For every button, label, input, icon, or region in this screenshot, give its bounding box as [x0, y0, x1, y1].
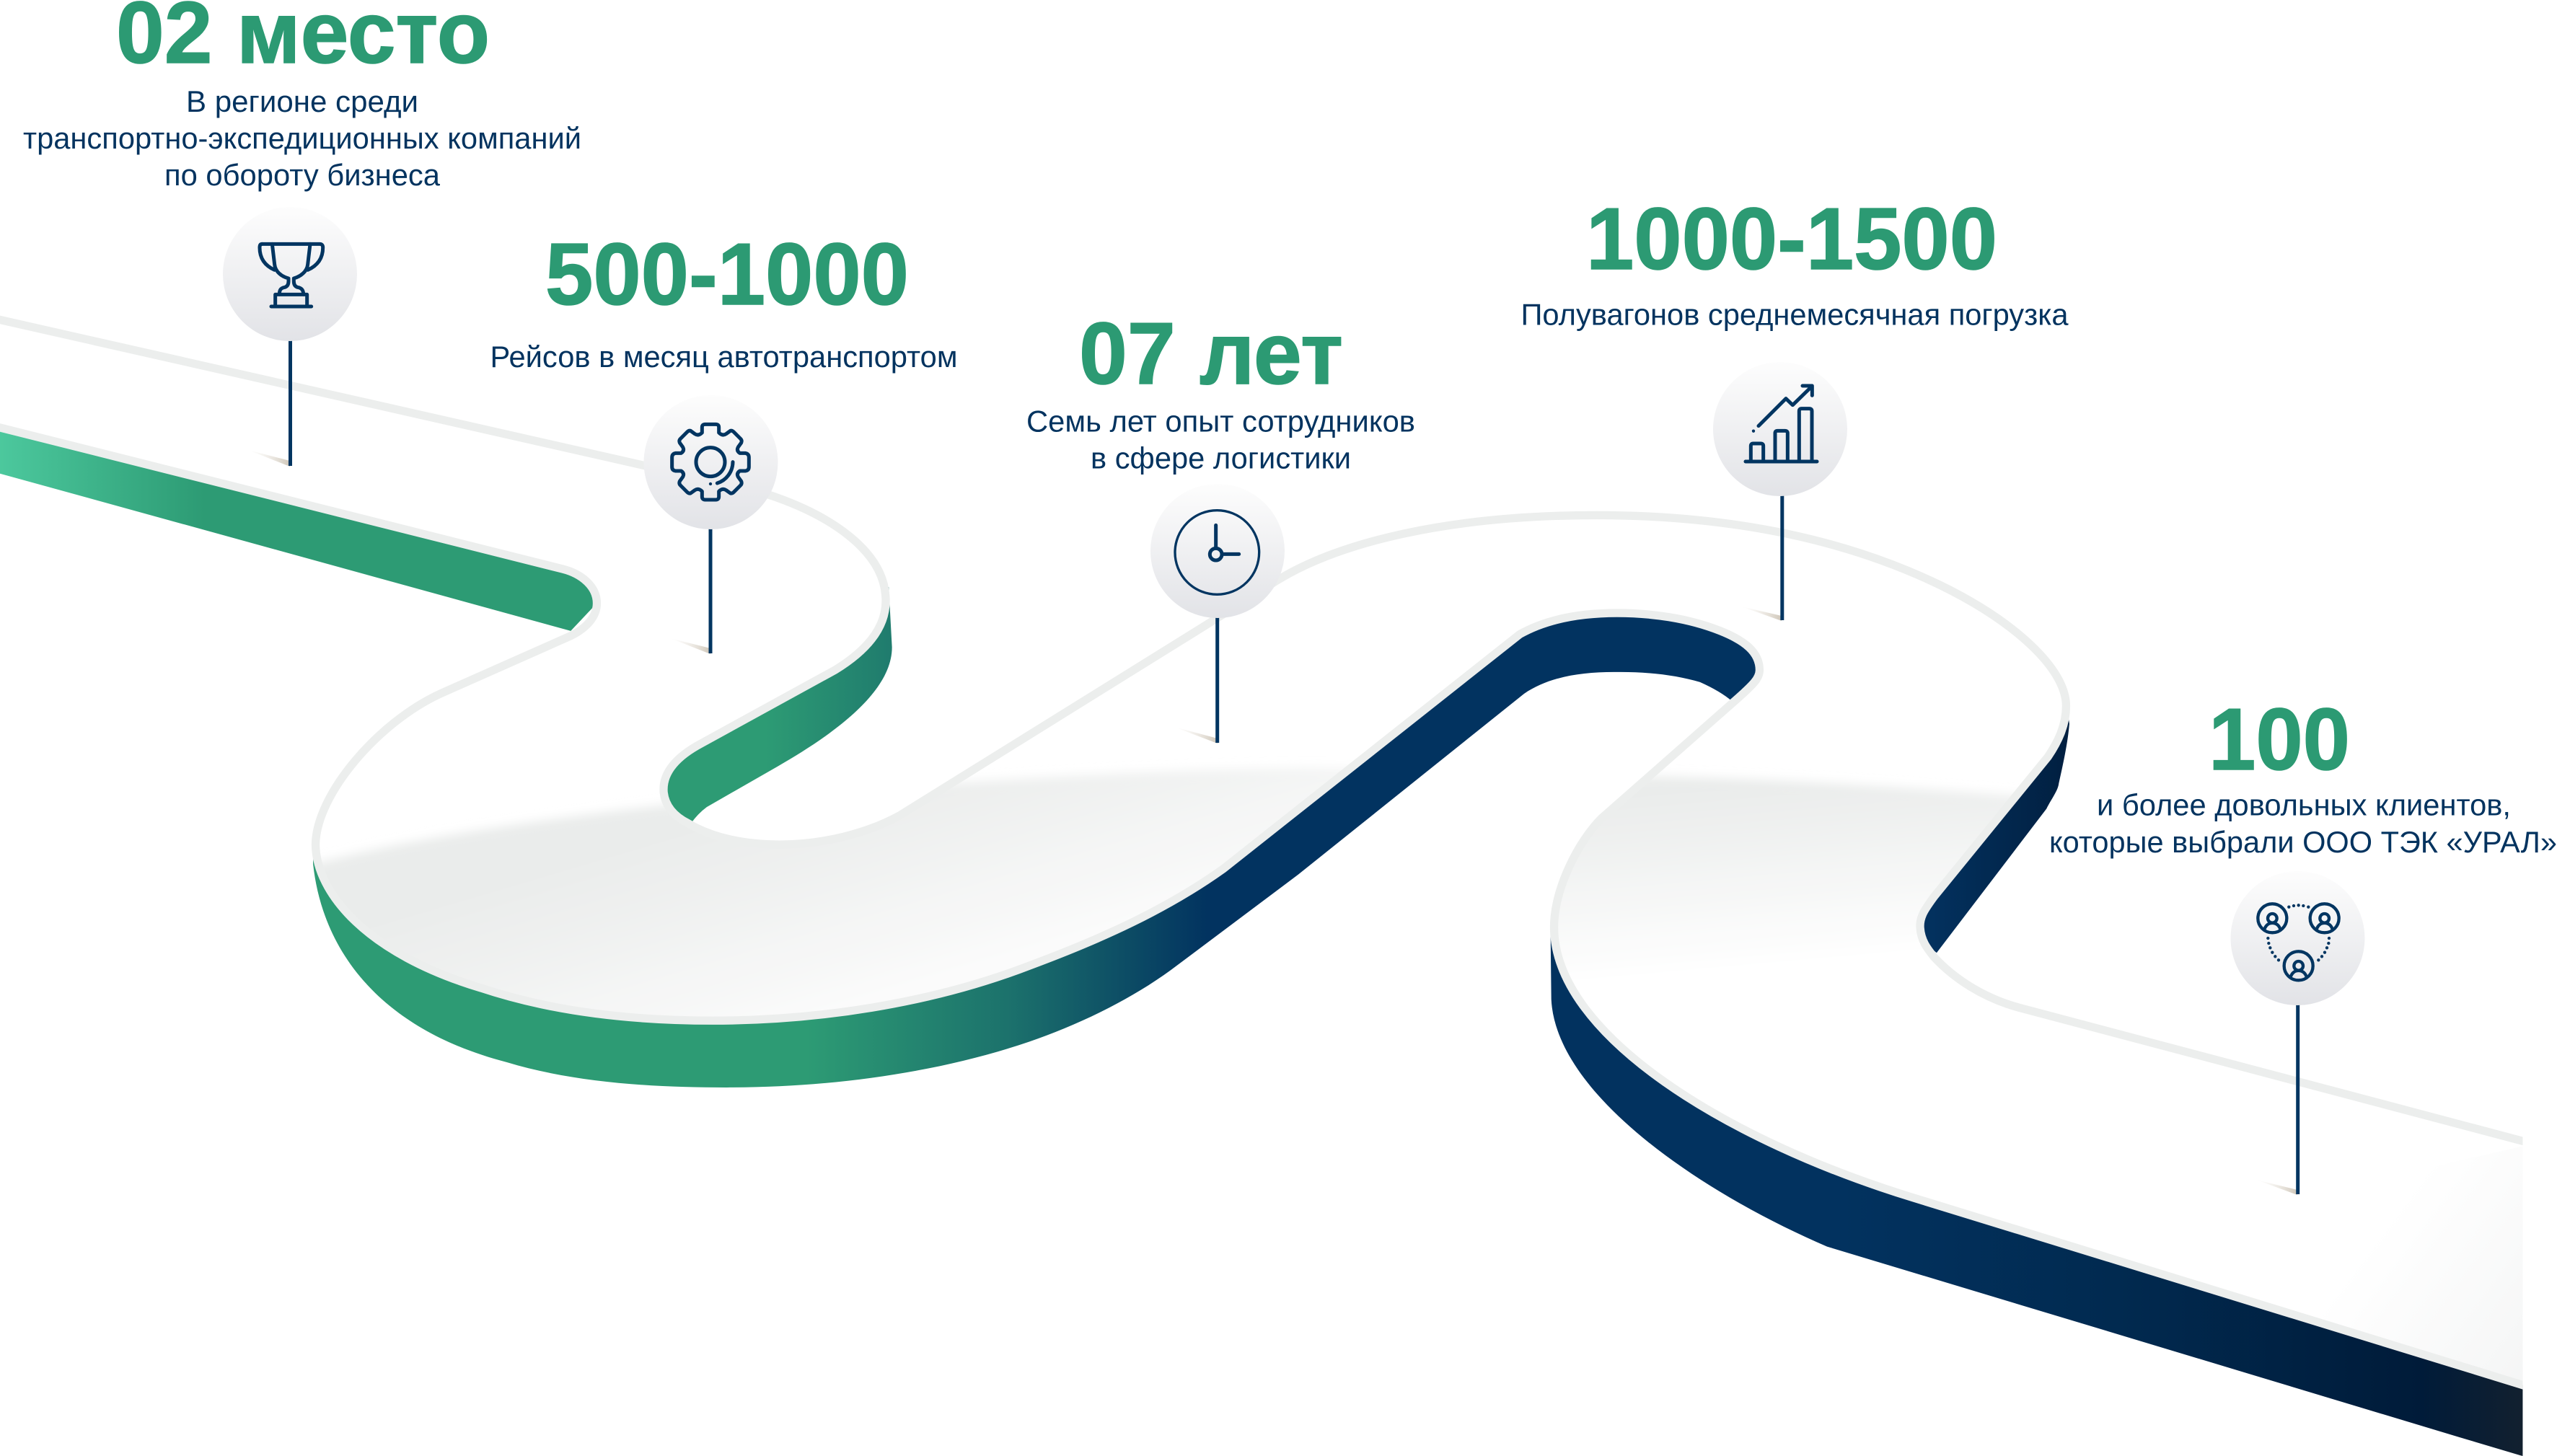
milestone: 500-1000: [490, 225, 958, 654]
pin tail shadow: [2256, 1180, 2297, 1195]
pin stem: [289, 339, 292, 466]
milestone: 1000-1500: [1520, 190, 2069, 621]
description: 07 лет: [1026, 405, 1415, 475]
road top surface: [0, 415, 2523, 1380]
description: 100: которые выбрали ООО ТЭК «УРАЛ»: [2049, 825, 2557, 859]
milestone: 07 лет: [1026, 304, 1415, 744]
road side wall: large green to navy curve: [313, 603, 1769, 1087]
description: 07 лет: в сфере логистики: [1091, 441, 1351, 475]
road side wall: inner green curve: [652, 587, 892, 824]
milestone: 02 место: [23, 0, 581, 467]
road: winding 3D path: [0, 318, 2544, 1456]
heading: 100: 100: [2209, 690, 2350, 788]
icon: connected people: [2258, 904, 2339, 980]
heading: 500-1000: 500-1000: [545, 225, 909, 323]
description: 02 место: по обороту бизнеса: [164, 158, 441, 192]
description: 02 место: В регионе среди: [186, 84, 418, 118]
road side wall: bottom navy strip: [1551, 913, 2527, 1456]
road edge outline: [0, 318, 2536, 1389]
description: 500-1000: Рейсов в месяц автотранспортом: [490, 340, 958, 374]
icon bubble: [223, 207, 357, 341]
description: 02 место: транспортно-экспедиционных компаний: [23, 121, 581, 155]
icon: clock: [1175, 511, 1259, 594]
heading: 07 лет: 07 лет: [1079, 304, 1343, 402]
pin stem: [2296, 999, 2299, 1194]
pin tail shadow: [1174, 727, 1218, 744]
pin stem: [1215, 613, 1219, 743]
pin tail shadow: [248, 450, 290, 467]
road side wall: right navy strip: [1924, 720, 2069, 953]
pin stem: [708, 523, 713, 653]
description: 100: [2049, 788, 2557, 859]
pin stem: [1780, 490, 1784, 620]
description: 07 лет: Семь лет опыт сотрудников: [1026, 405, 1415, 438]
icon: gear: [672, 424, 749, 500]
road surface shading: [302, 768, 2544, 1402]
icon bubble: [2230, 871, 2364, 1005]
icon: trophy: [260, 244, 323, 306]
icon: growth chart: [1746, 386, 1817, 462]
icon bubble: [643, 395, 778, 529]
road side wall: first green strip: [0, 416, 597, 631]
description: 100: и более довольных клиентов,: [2097, 788, 2511, 822]
milestone: 100: [2049, 690, 2557, 1195]
pin tail shadow: [1741, 606, 1782, 621]
icon bubble: [1713, 362, 1847, 496]
icon bubble: [1150, 484, 1285, 618]
description: 02 место: [23, 84, 581, 192]
pin tail shadow: [670, 638, 710, 654]
description: 1000-1500: Полувагонов среднемесячная погрузка: [1520, 298, 2069, 332]
heading: 1000-1500: 1000-1500: [1586, 190, 1997, 288]
